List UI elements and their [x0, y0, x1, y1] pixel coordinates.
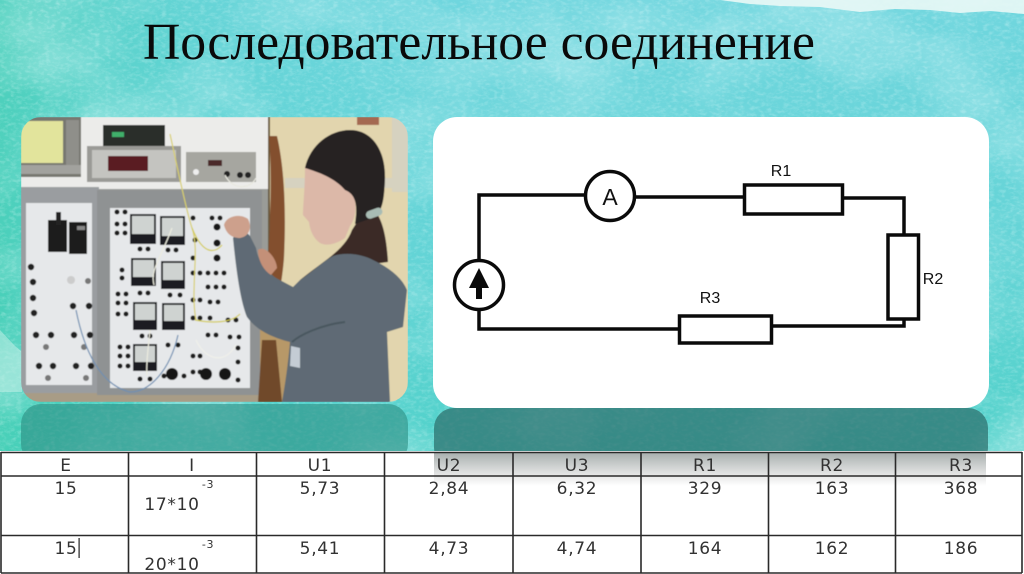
header row: U3	[565, 456, 589, 476]
instrument with red display	[87, 146, 181, 182]
row 2: 4,73	[429, 539, 469, 559]
row 2	[54, 538, 978, 574]
resistor R1: R1	[771, 163, 791, 180]
row 2: 186	[944, 539, 978, 559]
row 1: 15	[54, 479, 78, 499]
oscilloscope	[21, 117, 81, 177]
header row: R2	[820, 456, 844, 476]
lower-wall shadow and brown cable bundle	[260, 325, 292, 402]
circuit panel	[433, 117, 989, 408]
row 1: 163	[815, 479, 849, 499]
data table	[0, 451, 1024, 574]
resistor R1	[744, 163, 842, 214]
circuit panel reflection	[434, 408, 988, 468]
hands	[224, 216, 250, 238]
left panel	[21, 187, 99, 393]
right panel	[76, 134, 262, 395]
row 2: -3	[202, 538, 214, 551]
photo: student at the lab stand	[21, 117, 408, 402]
hair	[305, 130, 385, 224]
row 2: 162	[815, 539, 849, 559]
header row: U1	[308, 456, 332, 476]
wall trim	[285, 117, 408, 192]
patch wires	[76, 134, 256, 392]
reflection fade over table	[434, 452, 986, 486]
title: Последовательное соединение	[143, 14, 815, 71]
row 1: 5,73	[300, 479, 340, 499]
resistor R3: R3	[700, 290, 720, 307]
large knobs	[166, 224, 231, 380]
resistor R2: R2	[923, 271, 943, 288]
header row: I	[189, 456, 195, 476]
table text	[54, 456, 978, 574]
row 1: 6,32	[557, 479, 597, 499]
white wall board	[21, 117, 268, 189]
header row: R3	[949, 456, 973, 476]
wires	[479, 195, 904, 329]
face	[303, 166, 355, 245]
analog meters	[130, 214, 185, 371]
row 2: 164	[688, 539, 722, 559]
header row: R1	[693, 456, 717, 476]
row 1: 2,84	[429, 479, 469, 499]
row 1	[54, 478, 978, 515]
ammeter A	[586, 172, 634, 220]
row 2: 4,74	[557, 539, 597, 559]
hair tie	[365, 207, 384, 220]
header row	[60, 456, 973, 476]
ammeter A: A	[602, 184, 618, 210]
voltage source	[454, 260, 504, 310]
ponytail	[300, 216, 388, 280]
hoodie body	[233, 232, 407, 402]
resistor R2	[888, 235, 943, 319]
header row: E	[60, 456, 72, 476]
photo reflection	[21, 404, 408, 464]
row 1: -3	[202, 478, 214, 491]
small instrument	[186, 152, 256, 182]
row 1: 329	[688, 479, 722, 499]
top digital meter	[103, 125, 165, 147]
header row: U2	[437, 456, 461, 476]
student	[224, 130, 407, 402]
row 1: 17*10	[144, 495, 200, 515]
row 1: 368	[944, 479, 978, 499]
sockets	[114, 210, 242, 382]
row 2: 5,41	[300, 539, 340, 559]
row 2: 15	[54, 539, 78, 559]
resistor R3	[680, 290, 772, 343]
